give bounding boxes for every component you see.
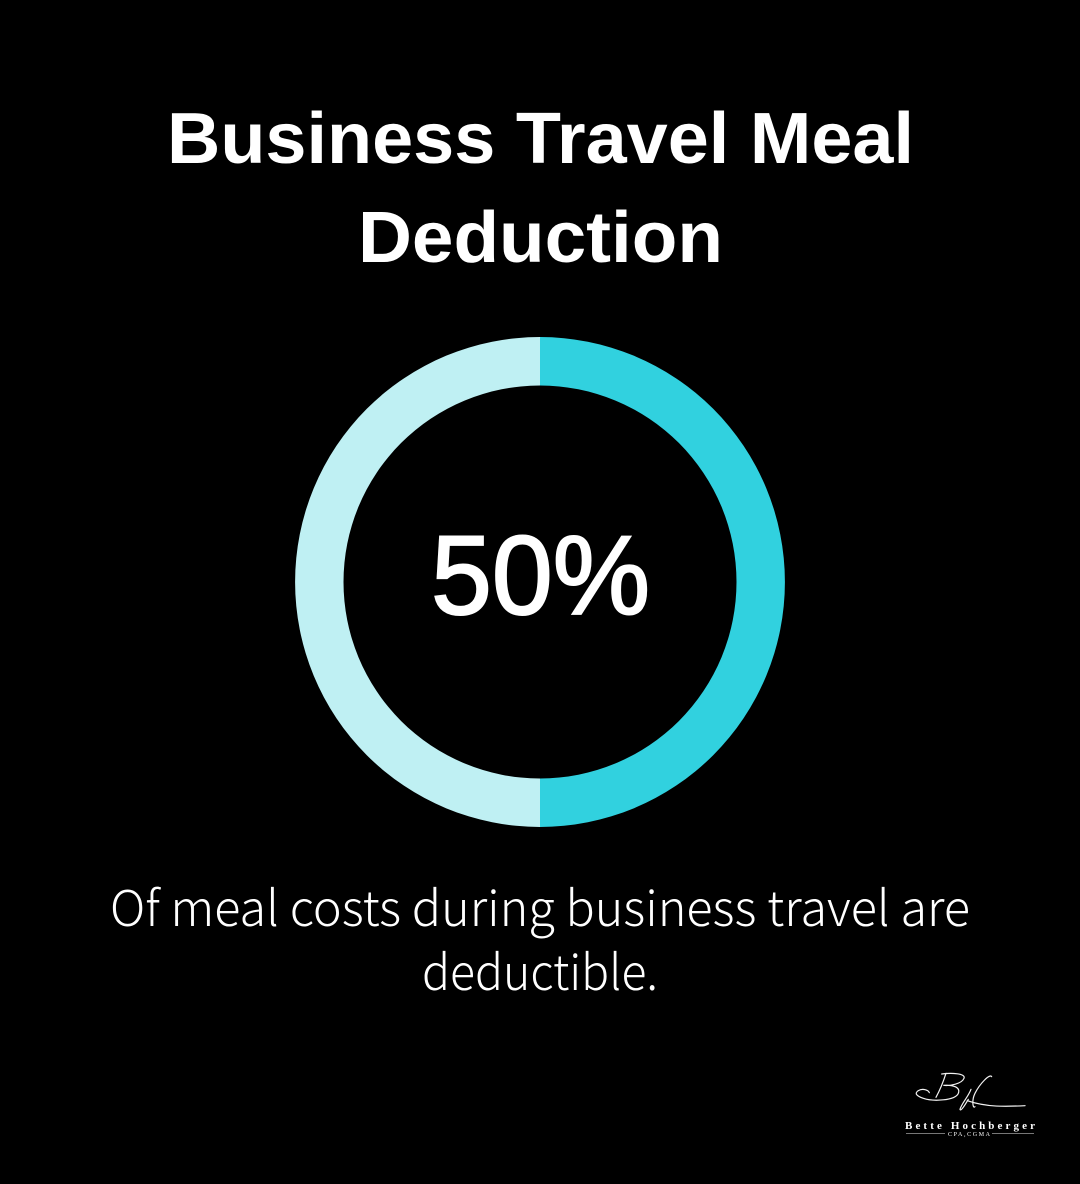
logo line right (992, 1133, 1034, 1134)
caption: Of meal costs during business travel are (110, 870, 970, 941)
caption (110, 870, 970, 1005)
logo line left (906, 1133, 945, 1134)
center value: 50% (431, 513, 650, 638)
caption: deductible. (422, 934, 658, 1005)
title: Business Travel Meal (167, 99, 914, 179)
remaining half of ring (295, 337, 540, 827)
signature monogram (916, 1073, 1025, 1110)
highlighted half of ring (540, 337, 785, 827)
title (167, 99, 914, 278)
logo name: Bette Hochberger (905, 1120, 1035, 1132)
title: Deduction (358, 198, 723, 278)
donut chart: 50% (295, 337, 785, 827)
logo: Bette Hochberger signature (905, 1073, 1035, 1138)
logo credentials: CPA,CGMA (948, 1132, 991, 1138)
